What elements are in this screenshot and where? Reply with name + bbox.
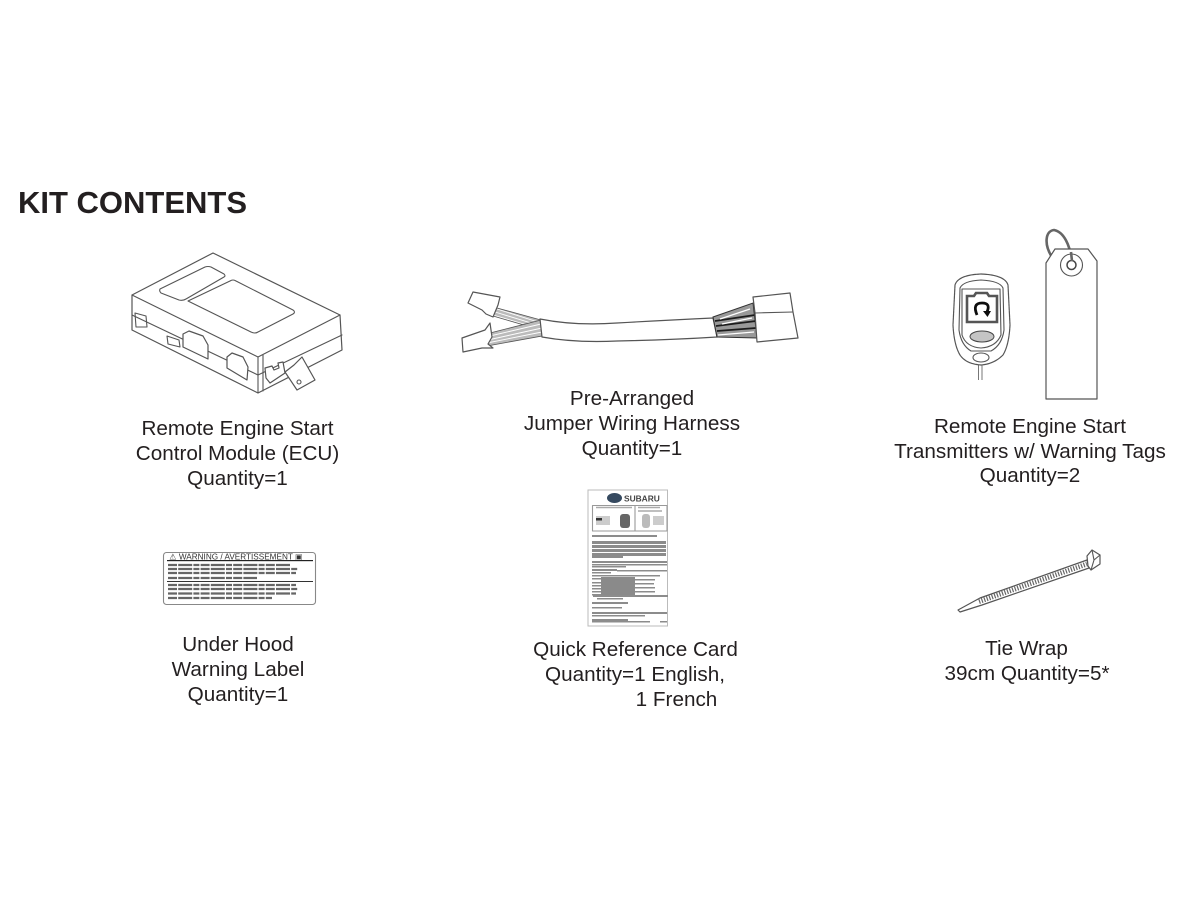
caption: quick reference card: Quantity=1 English,	[545, 663, 725, 686]
icon: quick reference card	[588, 490, 668, 626]
caption: wiring harness: Pre-Arranged	[570, 387, 694, 410]
caption: transmitters: Remote Engine Start	[934, 415, 1126, 438]
caption: control module: Control Module (ECU)	[136, 442, 339, 465]
caption: tie wrap	[944, 637, 1110, 685]
caption: quick reference card	[533, 638, 738, 711]
title: KIT CONTENTS	[18, 185, 247, 220]
caption: warning label: Quantity=1	[188, 683, 288, 706]
caption: control module: Quantity=1	[187, 467, 288, 490]
caption: wiring harness: Jumper Wiring Harness	[524, 412, 740, 435]
caption: wiring harness	[524, 387, 740, 460]
caption: quick reference card: Quick Reference Card	[533, 638, 738, 661]
caption: tie wrap: Tie Wrap	[985, 637, 1068, 660]
icon: jumper wiring harness	[462, 292, 798, 352]
caption: tie wrap: 39cm Quantity=5*	[944, 662, 1110, 685]
caption: transmitters	[894, 415, 1166, 487]
caption: control module	[136, 417, 339, 490]
icon: under hood warning label: ⚠ WARNING / AVERTISSEMENT ▣	[169, 552, 303, 562]
caption: warning label: Warning Label	[172, 658, 304, 681]
icon: remote transmitter	[953, 274, 1010, 380]
caption: transmitters: Transmitters w/ Warning Tags	[894, 440, 1166, 463]
caption: control module: Remote Engine Start	[141, 417, 334, 440]
icon: warning tag	[1046, 230, 1097, 399]
icon: under hood warning label	[164, 552, 316, 604]
caption: warning label: Under Hood	[182, 633, 294, 656]
caption: wiring harness: Quantity=1	[582, 437, 682, 460]
icon: control module ECU	[132, 253, 342, 393]
caption: warning label	[172, 633, 304, 706]
caption: quick reference card: 1 French	[636, 688, 717, 711]
logo: Subaru: SUBARU	[624, 494, 660, 504]
icon: tie wrap	[958, 550, 1100, 612]
caption: transmitters: Quantity=2	[980, 464, 1080, 487]
